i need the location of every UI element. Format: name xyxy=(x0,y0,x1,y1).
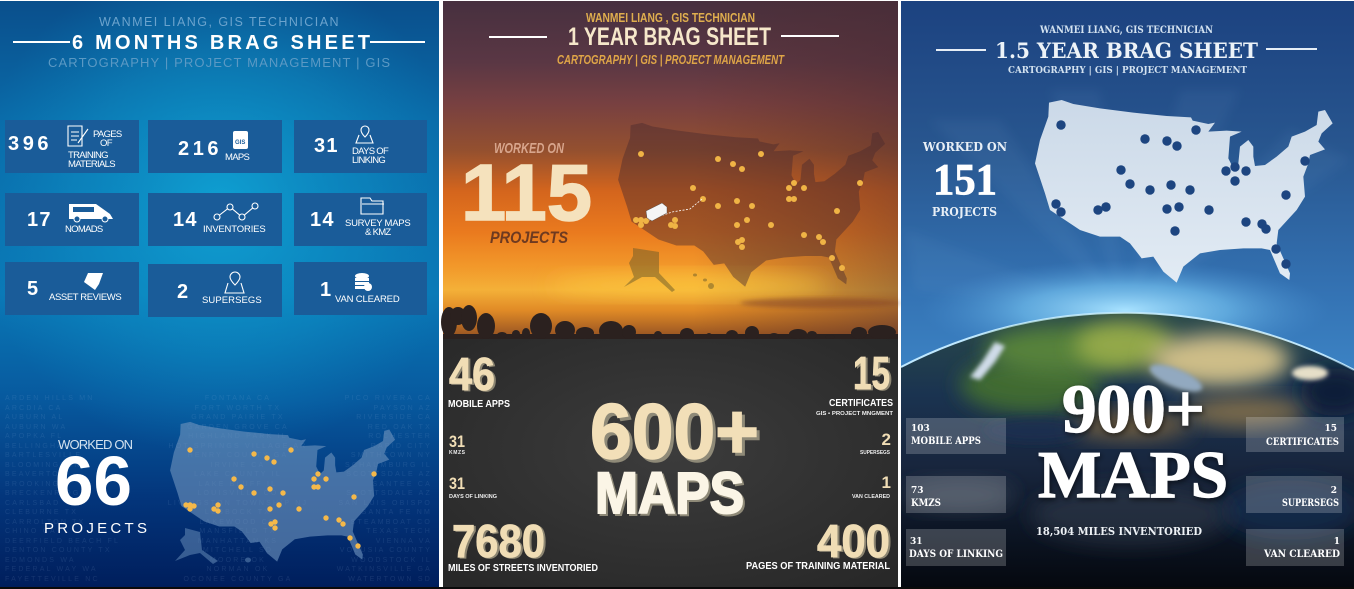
earth globe xyxy=(901,313,1354,587)
background city list: LAKEWOOD CO xyxy=(199,519,277,526)
header: 6 months: WANMEI LIANG, GIS TECHNICIAN xyxy=(99,14,340,29)
stat: 46 mobile apps: 46 xyxy=(451,349,497,401)
callout: worked on 151 projects: 151 xyxy=(933,155,997,204)
stat: 15 certificates: 15 xyxy=(853,347,890,399)
stat: 7680 miles: MILES OF STREETS INVENTORIED xyxy=(448,563,598,574)
tile: 17 nomads xyxy=(27,204,113,235)
background city list: FEDERAL WAY WA xyxy=(5,566,98,573)
headline: 900+ maps: MAPS xyxy=(1038,438,1228,512)
callout: worked on 151 projects: PROJECTS xyxy=(932,205,997,219)
background city list: CLEBURNE TX xyxy=(5,509,78,516)
tile: 216 maps: GIS xyxy=(235,140,245,146)
stat box: 15 certificates: 15 xyxy=(1324,424,1337,434)
stat box: 103 mobile apps: 103 xyxy=(911,424,930,434)
background city list: BROOKINGS xyxy=(5,481,67,488)
background city list: BELLINGHAM WA xyxy=(5,443,92,450)
background city list: PAYSON AZ xyxy=(374,405,432,412)
background city list: NORMAN OK xyxy=(207,566,269,573)
stat: 2 supersegs: SUPERSEGS xyxy=(860,450,890,456)
tile: 14 survey maps: & KMZ xyxy=(365,227,391,238)
tile: 1 van cleared xyxy=(320,273,400,305)
background city list: HENRY COUNTY GA xyxy=(188,452,288,459)
background city list: SANTEE CA xyxy=(373,481,432,488)
headline: 600+ maps: 600+ xyxy=(593,390,762,478)
background city list: HIGHLAND PARK IL xyxy=(188,433,288,440)
background city list: SCHAUMBURG IL xyxy=(345,462,432,469)
header: 1.5 year xyxy=(936,25,1317,76)
header: 1 year xyxy=(489,10,839,67)
background city list: STEAMBOAT CO xyxy=(351,519,432,526)
stat: 46 mobile apps: 46 xyxy=(449,348,495,400)
tile: 396 pages: TRAINING xyxy=(68,150,108,161)
stat: 1 van cleared: VAN CLEARED xyxy=(852,494,890,500)
background city list: WATKINSVILLE GA xyxy=(337,566,432,573)
headline: 600+ maps: MAPS xyxy=(597,463,746,528)
stat: 31 days of linking: 31 xyxy=(449,474,465,493)
tile: 2 supersegs: 2 xyxy=(177,281,190,303)
tile: 396 pages xyxy=(8,126,122,170)
header: 1.5 year: CARTOGRAPHY | GIS | PROJECT MANAGEMENT xyxy=(1008,65,1247,76)
background city list: SANTA FE NM xyxy=(362,509,432,516)
background city list: CHINO CA xyxy=(5,528,57,535)
stat: 31 kmzs: KMZS xyxy=(449,450,466,456)
background city list: FAYETTEVILLE NC xyxy=(5,576,100,583)
tile: 1 van cleared: VAN CLEARED xyxy=(335,294,400,305)
tile: 1 van cleared: 1 xyxy=(320,279,333,301)
stat: 46 mobile apps: MOBILE APPS xyxy=(448,399,510,410)
tile: 14 survey maps xyxy=(310,198,410,238)
background city list: GRAND PAIRIE TX xyxy=(191,414,285,421)
background city list: SCOTTSDALE AZ xyxy=(346,490,432,497)
stat: 400 pages: 400 xyxy=(817,515,890,567)
callout: worked on 115 projects: PROJECTS xyxy=(490,228,569,247)
tile: 216 maps: MAPS xyxy=(225,152,249,163)
stat: 400 pages xyxy=(746,515,892,572)
background city list xyxy=(5,395,432,583)
background city list: SAN LUIS OBISPO xyxy=(338,500,432,507)
tile: 216 maps: 216 xyxy=(178,138,220,160)
stat: 31 days of linking: DAYS OF LINKING xyxy=(449,494,497,500)
callout: worked on 151 projects xyxy=(922,140,1007,219)
stat box: 103 mobile apps xyxy=(906,418,1006,454)
stat box: 2 supersegs: SUPERSEGS xyxy=(1282,498,1339,509)
stat: 400 pages: PAGES OF TRAINING MATERIAL xyxy=(746,561,890,572)
header: 6 months: CARTOGRAPHY | PROJECT MANAGEMENT | GIS xyxy=(48,55,390,70)
icon: van and route xyxy=(646,199,702,221)
background city list: LAKE COUNTY IL xyxy=(194,471,282,478)
stat box: 31 days of linking: 31 xyxy=(910,537,923,547)
tile: 31 days of linking: 31 xyxy=(314,135,339,157)
background city list: RAPID CITY xyxy=(371,443,432,450)
stat: 2 supersegs xyxy=(860,430,891,456)
stat: 31 days of linking xyxy=(449,474,497,500)
tile: 5 asset reviews: ASSET REVIEWS xyxy=(49,292,121,303)
background city list: SCOTTSDALE AZ xyxy=(346,471,432,478)
stat: 2 supersegs: 2 xyxy=(882,430,891,449)
background city list: DEERFIELD BEACH FL xyxy=(5,538,120,545)
tile: 17 nomads: NOMADS xyxy=(65,224,103,235)
background city list: BLOOMINGTON xyxy=(5,462,82,469)
headline: 900+ maps xyxy=(1038,371,1228,512)
stat box: 73 kmzs xyxy=(906,476,1006,513)
background city list: ARDEN HILLS MN xyxy=(5,395,95,402)
tile: 2 supersegs: SUPERSEGS xyxy=(202,295,261,306)
stat: 15 certificates: GIS • PROJECT MNGMENT xyxy=(816,411,894,417)
callout: worked on 115 projects: WORKED ON xyxy=(494,140,565,157)
background city list: MANHATTAN KS xyxy=(198,538,278,545)
tile: 14 survey maps: 14 xyxy=(310,209,335,231)
text: miles inventoried: 18,504 MILES INVENTORIED xyxy=(1036,524,1202,538)
background city list: APOPKA FL xyxy=(5,433,63,440)
stat box: 15 certificates xyxy=(1246,417,1344,452)
stat box: 1 van cleared: 1 xyxy=(1334,537,1340,547)
tile: 396 pages: PAGES xyxy=(93,129,122,140)
header: 6 months xyxy=(13,14,425,70)
background city list: CARROLTON TX xyxy=(5,519,85,526)
background city list: GARDEN GROVE CA xyxy=(187,424,289,431)
map: 1.5 year projects xyxy=(1035,100,1333,283)
background city list: IRVINE CA xyxy=(211,462,265,469)
bottom edge xyxy=(0,587,1354,589)
background city list: VOLUSIA COUNTY xyxy=(340,547,432,554)
callout: worked on 151 projects: WORKED ON xyxy=(922,140,1007,154)
background city list: RED OAK TX xyxy=(368,424,432,431)
callout: worked on 66 projects: 66 xyxy=(55,442,132,520)
headline: 600+ maps: MAPS xyxy=(595,461,744,526)
background city list: BRECKENRIDGE xyxy=(5,490,87,497)
background city list: DENTON COUNTY TX xyxy=(5,547,112,554)
stat box: 1 van cleared xyxy=(1246,529,1344,566)
tile: 31 days of linking xyxy=(314,126,389,166)
background city list: ROCHESTER xyxy=(368,433,432,440)
stat: 1 van cleared: 1 xyxy=(882,473,891,492)
tile: 14 inventories: 14 xyxy=(173,209,198,231)
stat: 400 pages: 400 xyxy=(819,516,892,568)
tile: 216 maps xyxy=(178,131,249,163)
map: 1 year projects xyxy=(618,123,885,292)
callout: worked on 66 projects: WORKED ON xyxy=(58,437,133,452)
background city list: AUBURN AL xyxy=(5,414,64,421)
stat: 1 van cleared xyxy=(852,473,891,500)
stat box: 1 van cleared: VAN CLEARED xyxy=(1263,549,1340,560)
header: 1 year: CARTOGRAPHY | GIS | PROJECT MANAGEMENT xyxy=(557,52,785,67)
stat: 7680 miles xyxy=(448,515,598,574)
background city list: SMITHTOWN NY xyxy=(351,452,432,459)
header: 1 year: 1 YEAR BRAG SHEET xyxy=(568,23,771,51)
tile: 14 inventories: INVENTORIES xyxy=(203,224,265,235)
background city list: HOT SPRINGS VILLAGE AR xyxy=(169,443,307,450)
tile: 17 nomads: 17 xyxy=(27,209,52,231)
background city list: AUBURN WA xyxy=(5,424,67,431)
stat: 15 certificates: 15 xyxy=(855,348,892,400)
light rays xyxy=(905,90,1350,313)
panel: 6 months brag sheet xyxy=(0,1,439,587)
stat tiles xyxy=(5,120,427,317)
headline: 600+ maps xyxy=(590,387,762,528)
header: 6 months: 6 MONTHS BRAG SHEET xyxy=(72,32,370,54)
background city list: OCONEE COUNTY GA xyxy=(184,576,292,583)
stat: 15 certificates xyxy=(816,347,894,417)
background city list: BEAVERTON xyxy=(5,471,67,478)
background city list: LIVINGSTON TOWNSHIP NJ xyxy=(168,500,308,507)
tile: 31 days of linking: LINKING xyxy=(352,155,385,166)
header: 1.5 year: WANMEI LIANG, GIS TECHNICIAN xyxy=(1039,25,1213,36)
tile: 5 asset reviews xyxy=(27,273,121,303)
tile: 14 inventories xyxy=(173,203,265,235)
tile: 5 asset reviews: 5 xyxy=(27,278,40,300)
callout: worked on 115 projects: 115 xyxy=(461,148,592,237)
background city list: LAKE BLUFF IL xyxy=(199,481,277,488)
callout: worked on 66 projects xyxy=(44,437,147,537)
background city list: CARLSBAD xyxy=(5,500,60,507)
background city list: RIVERSIDE CA xyxy=(356,414,432,421)
stat: 7680 miles: 7680 xyxy=(454,516,547,568)
map: 6 months projects xyxy=(170,422,395,564)
header: 1 year: WANMEI LIANG , GIS TECHNICIAN xyxy=(586,10,755,25)
headline: 900+ maps: 900+ xyxy=(1062,371,1205,447)
stat box: 73 kmzs: 73 xyxy=(911,486,924,496)
stat: 7680 miles: 7680 xyxy=(452,515,545,567)
callout: worked on 66 projects: PROJECTS xyxy=(44,520,147,537)
headline: 600+ maps: 600+ xyxy=(590,387,759,475)
background city list: TEXAS TECH xyxy=(366,528,432,535)
stat: 31 kmzs: 31 xyxy=(449,432,465,451)
stat: 15 certificates: CERTIFICATES xyxy=(829,398,893,409)
background city list: WOODSTOCK IL xyxy=(351,557,432,564)
background city list: FORT WORTH TX xyxy=(195,405,281,412)
stat box: 31 days of linking xyxy=(906,529,1006,566)
background city list: ARCDIA CA xyxy=(5,405,63,412)
tile: 396 pages: MATERIALS xyxy=(68,159,115,170)
background city list: MANSFIELD TX xyxy=(199,528,277,535)
tile: 31 days of linking: DAYS OF xyxy=(352,146,389,157)
background city list: MOORE OK xyxy=(210,557,266,564)
stat box: 2 supersegs: 2 xyxy=(1331,486,1337,496)
background city list: FONTANA CA xyxy=(205,395,271,402)
stat box: 15 certificates: CERTIFICATES xyxy=(1266,437,1339,448)
background city list: LOUISVILLE CO xyxy=(197,490,279,497)
background city list: EDMONDS WA xyxy=(5,557,76,564)
header: 1.5 year: 1.5 YEAR BRAG SHEET xyxy=(995,38,1258,63)
background city list: WATERTOWN SD xyxy=(348,576,432,583)
tile: 2 supersegs xyxy=(177,272,261,306)
background city list: PICO RIVERA CA xyxy=(345,395,432,402)
stat box: 73 kmzs: KMZS xyxy=(911,498,941,509)
stat box: 31 days of linking: DAYS OF LINKING xyxy=(909,549,1003,560)
stat box: 2 supersegs xyxy=(1246,476,1342,513)
tree line xyxy=(441,305,898,341)
tile: 14 survey maps: SURVEY MAPS xyxy=(345,218,410,229)
background city list: LUBBOCK TX xyxy=(205,509,271,516)
stat: 46 mobile apps xyxy=(448,348,510,410)
tile: 396 pages: 396 xyxy=(8,133,50,155)
background city list: VIENNA VA xyxy=(376,538,432,545)
stat box: 103 mobile apps: MOBILE APPS xyxy=(911,436,981,447)
background city list: MITCHELL SD xyxy=(203,547,273,554)
chalkboard stats background xyxy=(443,339,898,587)
tile: 396 pages: OF xyxy=(100,138,113,149)
background city list: BARTLESVILLE xyxy=(5,452,82,459)
